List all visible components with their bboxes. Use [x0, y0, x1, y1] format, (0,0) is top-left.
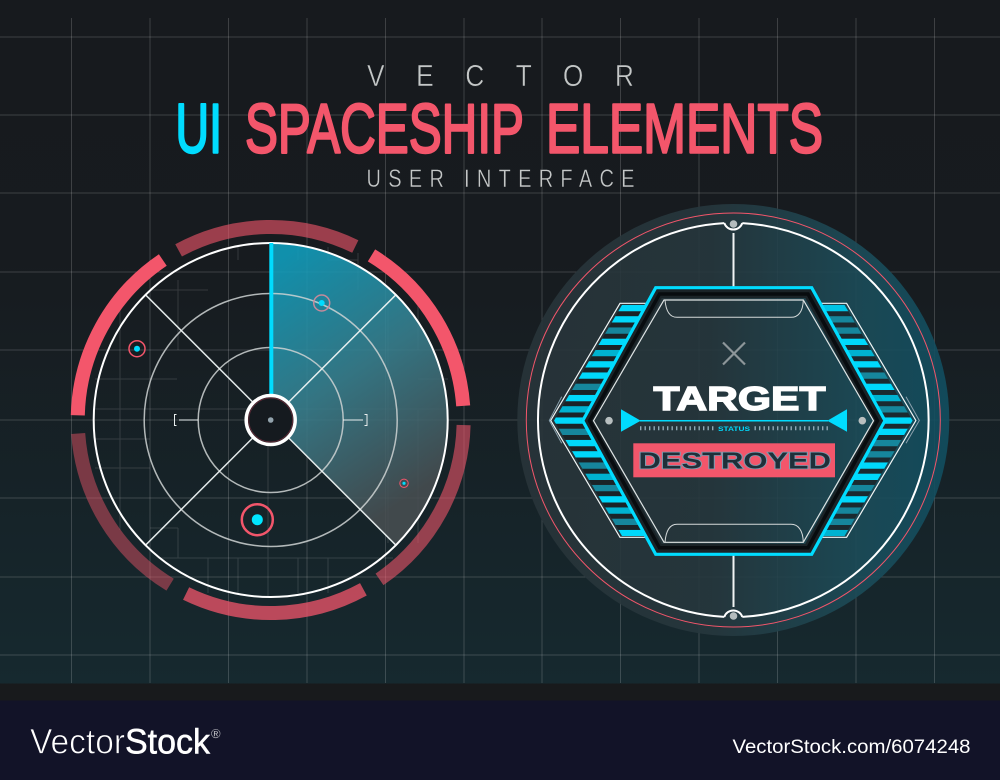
radar blip: left — [129, 341, 145, 357]
footer url: VectorStock.com/6074248 — [732, 736, 970, 758]
radar blip: lower right — [400, 479, 408, 487]
status divider — [605, 409, 866, 433]
hexagon frame — [583, 288, 885, 554]
radar blip: upper right — [314, 295, 330, 311]
divider band — [0, 684, 1000, 700]
radar outer ring segments — [78, 227, 464, 613]
footer logo: Stock — [125, 722, 210, 761]
footer logo — [30, 722, 221, 761]
hexagon bottom tab — [665, 524, 803, 542]
radar sweep wedge — [271, 243, 448, 545]
icon: close cross — [723, 342, 745, 364]
radar outer circle — [94, 243, 448, 597]
right striped chevron — [816, 303, 919, 537]
destroyed badge — [633, 443, 835, 477]
radar range circles — [144, 294, 397, 546]
footer bar — [0, 700, 1000, 780]
heading: UI spaceship elements — [176, 90, 823, 168]
top connector — [724, 220, 742, 287]
radar blip: bottom — [242, 504, 273, 535]
subheading: user interface: USER INTERFACE — [366, 165, 635, 193]
bottom connector — [724, 555, 742, 620]
text: target: TARGET — [654, 381, 826, 418]
radar circuit lines — [95, 247, 448, 597]
radar range brackets — [174, 414, 367, 426]
target red ring — [526, 213, 940, 627]
heading: UI spaceship elements: SPACESHIP — [245, 90, 524, 168]
panel: target destroyed — [517, 204, 949, 636]
left striped chevron — [549, 303, 650, 537]
heading: UI spaceship elements: ELEMENTS — [546, 90, 823, 168]
heading: vector: VECTOR — [367, 59, 634, 94]
title block — [176, 59, 823, 193]
target disc — [517, 204, 949, 636]
radar diagonal axes — [146, 295, 396, 545]
heading: UI spaceship elements: UI — [176, 90, 222, 168]
radar sweep line — [269, 243, 273, 395]
panel: radar — [78, 227, 464, 613]
hexagon top tab — [665, 300, 803, 317]
target white ring — [538, 223, 929, 617]
destroyed badge: DESTROYED — [638, 447, 831, 473]
footer logo: Vector — [30, 722, 125, 761]
status divider: STATUS — [718, 426, 751, 433]
footer logo: ® — [211, 726, 221, 741]
radar hub — [246, 396, 295, 444]
